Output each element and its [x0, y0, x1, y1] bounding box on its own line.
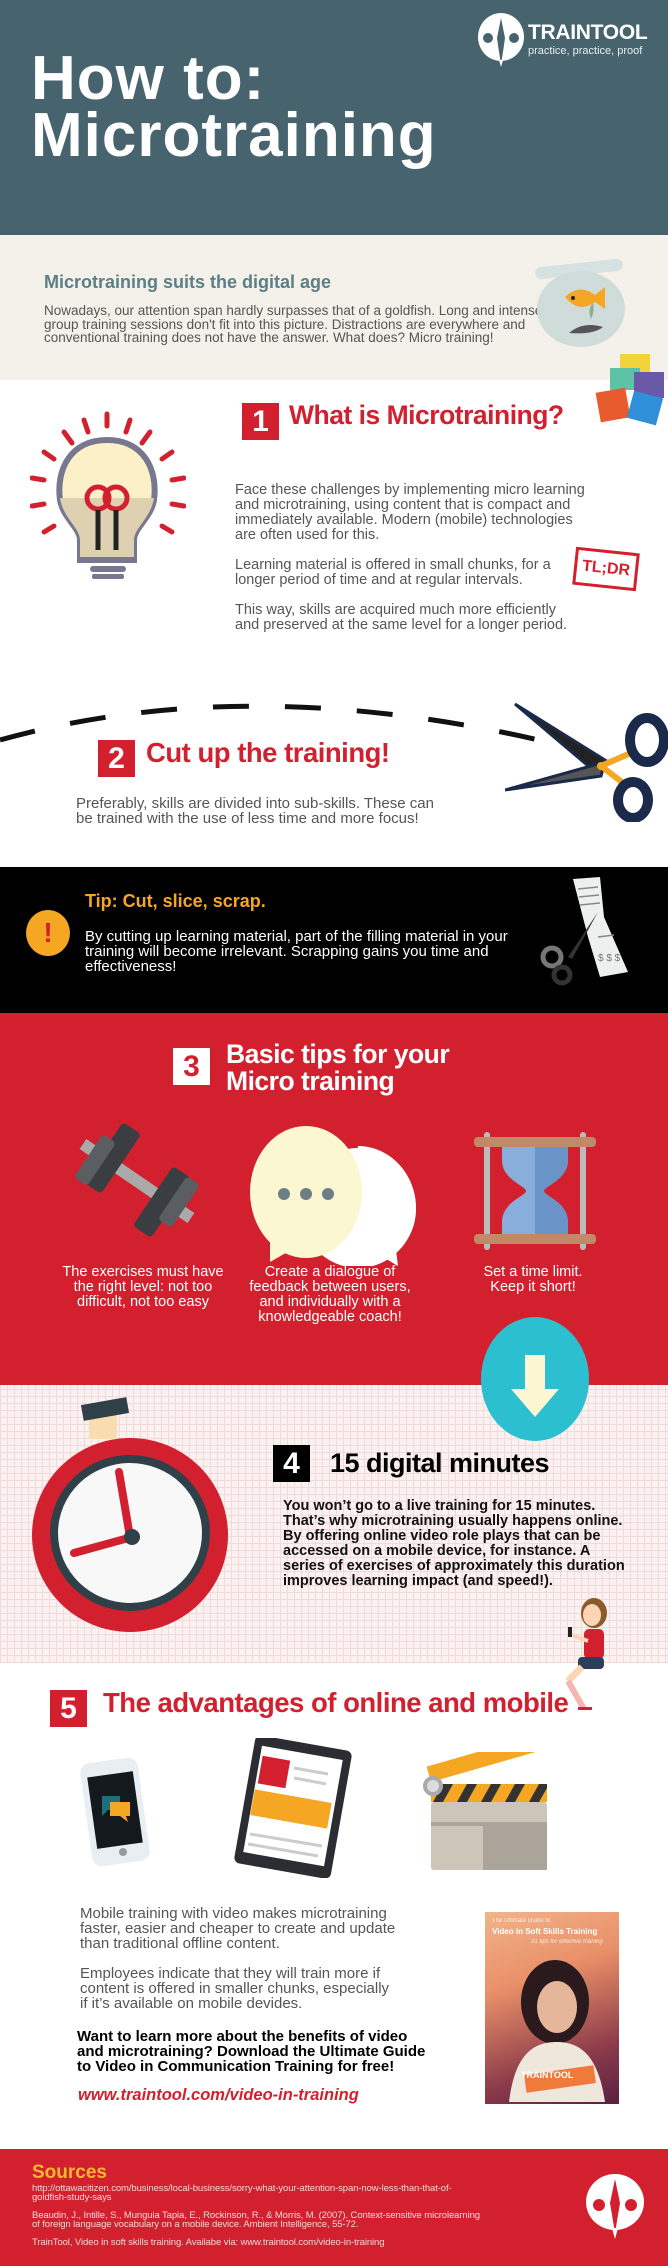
tip text: effectiveness!: [85, 958, 176, 975]
call to action: and microtraining? Download the Ultimate Guide: [77, 2043, 425, 2060]
heading 3: Basic tips for your: [226, 1039, 449, 1069]
book cover: The Ultimate Guide to: [492, 1918, 550, 1924]
section 4 text: accessed on a mobile device, for instance. A: [283, 1543, 590, 1559]
heading 3: Micro training: [226, 1066, 394, 1096]
tip text: [85, 928, 508, 975]
caption 3: [483, 1264, 583, 1295]
caption 1: the right level: not too: [74, 1279, 212, 1295]
section 4 text: By offering online video role plays that can be: [283, 1528, 600, 1544]
section 2 text: be trained with the use of less time and more focus!: [76, 810, 419, 827]
icon: download arrow circle: [481, 1317, 589, 1441]
section 5: [50, 1687, 619, 2104]
section 4 text: You won’t go to a live training for 15 minutes.: [283, 1498, 595, 1514]
sources list: http://ottawacitizen.com/business/local-business/sorry-what-your-attention-span-now-less-than-that-of-: [32, 2183, 452, 2194]
icon: girl with phone: [566, 1598, 607, 1710]
number 1: 1: [252, 405, 269, 438]
sources list: goldfish-study-says: [32, 2192, 111, 2203]
section 2 text: [76, 795, 434, 827]
intro text: conventional training does not have the answer. What does? Micro training!: [44, 330, 494, 345]
section 5 text: [80, 1905, 395, 2012]
book cover: 21 tips for effective training: [531, 1939, 603, 1945]
section 4 text: That’s why microtraining usually happens online.: [283, 1513, 622, 1529]
icon: logo mark: [478, 13, 524, 67]
number 2: [98, 740, 135, 777]
subtitle: Microtraining suits the digital age: [44, 272, 331, 292]
section 1: [30, 400, 640, 633]
number 3: 3: [183, 1050, 200, 1083]
intro text: [44, 303, 542, 345]
number 5: [50, 1690, 87, 1727]
icon: hourglass: [474, 1132, 596, 1250]
header band: [0, 0, 668, 235]
section 1 text: This way, skills are acquired much more efficiently: [235, 602, 556, 618]
book cover: Video in Soft Skills Training: [492, 1927, 597, 1936]
tip text: By cutting up learning material, part of the filling material in your: [85, 928, 508, 945]
title: Microtraining: [31, 101, 437, 170]
section 4 text: improves learning impact (and speed!).: [283, 1573, 553, 1589]
caption 2: knowledgeable coach!: [258, 1309, 402, 1325]
heading 2: Cut up the training!: [146, 737, 390, 768]
caption 1: difficult, not too easy: [77, 1294, 209, 1310]
call to action: to Video in Communication Training for free!: [77, 2058, 394, 2075]
section 5 text: faster, easier and cheaper to create and update: [80, 1920, 395, 1937]
icon: phone: [80, 1758, 150, 1866]
section 3 red band: [0, 1013, 668, 1385]
sources list: TrainTool, Video in soft skills training. Availabe via: www.traintool.com/video-in-training: [32, 2237, 384, 2248]
sources list: of foreign language vocabulary on a mobile device. Ambient Intelligence, 55-72.: [32, 2219, 358, 2230]
brand name: TRAINTOOL: [528, 21, 647, 44]
intro text: Nowadays, our attention span hardly surpasses that of a goldfish. Long and intense: [44, 303, 542, 318]
icon: fishbowl: [535, 259, 625, 347]
icon: light bulb: [30, 412, 186, 579]
section 1 text: Learning material is offered in small chunks, for a: [235, 557, 551, 573]
tip band: [0, 867, 668, 1013]
section 1 text: and microtraining, using content that is compact and: [235, 497, 570, 513]
icon: speech bubbles: [250, 1126, 416, 1266]
number 4: [273, 1445, 310, 1482]
icon: tablet: [234, 1738, 352, 1878]
intro band: [0, 235, 668, 380]
icon: exclamation: !: [43, 917, 53, 948]
sources list: [32, 2183, 480, 2248]
sources list: Beaudin, J., Intille, S., Munguia Tapia, E., Rockinson, R., & Morris, M. (2007). Context-sensitive microlearning: [32, 2210, 480, 2221]
logo: [478, 13, 648, 67]
icon: dumbbell: [75, 1124, 199, 1236]
section 5 text: content is offered in smaller chunks, especially: [80, 1980, 389, 1997]
number 3: [173, 1048, 210, 1085]
book cover: TRAINTOOL: [521, 2070, 573, 2080]
number 1: [242, 403, 279, 440]
call to action: [77, 2028, 425, 2075]
footer sources: [0, 2149, 668, 2266]
title: How to:: [31, 44, 265, 113]
icon: scissors: [505, 702, 668, 822]
call to action: Want to learn more about the benefits of video: [77, 2028, 407, 2045]
tagline: practice, practice, proof: [528, 45, 642, 57]
caption 3: Keep it short!: [490, 1279, 576, 1295]
number 4: 4: [283, 1447, 300, 1480]
heading 5: The advantages of online and mobile: [103, 1687, 568, 1718]
book cover: [485, 1912, 619, 2104]
caption 2: and individually with a: [259, 1294, 401, 1310]
section 5 text: Employees indicate that they will train more if: [80, 1965, 380, 1982]
section 1 text: longer period of time and at regular intervals.: [235, 572, 523, 588]
heading 1: What is Microtraining?: [289, 400, 564, 430]
icon: clapperboard: [423, 1752, 547, 1870]
caption 1: The exercises must have: [62, 1264, 224, 1280]
section 4 text: series of exercises of approximately this duration: [283, 1558, 625, 1574]
icon: footer logo: [586, 2174, 644, 2239]
number 5: 5: [60, 1692, 77, 1725]
section 1 text: and preserved at the same level for a longer period.: [235, 617, 567, 633]
section 4 grid band: [0, 1385, 668, 1663]
title: [31, 44, 437, 170]
caption 2: Create a dialogue of: [265, 1264, 395, 1280]
intro text: group training sessions don't fit into this picture. Distractions are everywhere and: [44, 316, 525, 332]
stamp: TL;DR: TL;DR: [581, 558, 631, 579]
section 4 text: [283, 1498, 625, 1589]
icon: receipt and scissors: $ $ $: [598, 953, 621, 964]
icon: stopwatch: [32, 1397, 228, 1632]
person illustration: [509, 1960, 605, 2102]
section 5 text: if it’s available on mobile devides.: [80, 1995, 302, 2012]
icon: lego blocks: [596, 354, 664, 426]
number 2: 2: [108, 742, 125, 775]
tip text: training will become irrelevant. Scrapping gains you time and: [85, 943, 489, 960]
caption 1: [62, 1264, 224, 1310]
caption 2: [249, 1264, 411, 1325]
sources heading: Sources: [32, 2162, 107, 2183]
section 5 text: than traditional offline content.: [80, 1935, 280, 1952]
section 1 text: [235, 482, 585, 633]
icon: exclamation: [26, 910, 70, 956]
tip heading: Tip: Cut, slice, scrap.: [85, 891, 266, 911]
dashed cut line: [0, 704, 535, 742]
section 1 text: Face these challenges by implementing micro learning: [235, 482, 585, 498]
section 1 text: immediately available. Modern (mobile) technologies: [235, 512, 573, 528]
icon: receipt and scissors: [540, 877, 628, 986]
link: www.traintool.com/video-in-training: [78, 2086, 359, 2104]
caption 2: feedback between users,: [249, 1279, 411, 1295]
heading 3: [226, 1039, 450, 1096]
stamp: TL;DR: [572, 547, 640, 591]
section 2 text: Preferably, skills are divided into sub-skills. These can: [76, 795, 434, 812]
section 2: [0, 702, 668, 827]
section 5 text: Mobile training with video makes microtraining: [80, 1905, 387, 1922]
heading 4: 15 digital minutes: [330, 1448, 549, 1478]
section 1 text: are often used for this.: [235, 527, 379, 543]
caption 3: Set a time limit.: [483, 1264, 583, 1280]
